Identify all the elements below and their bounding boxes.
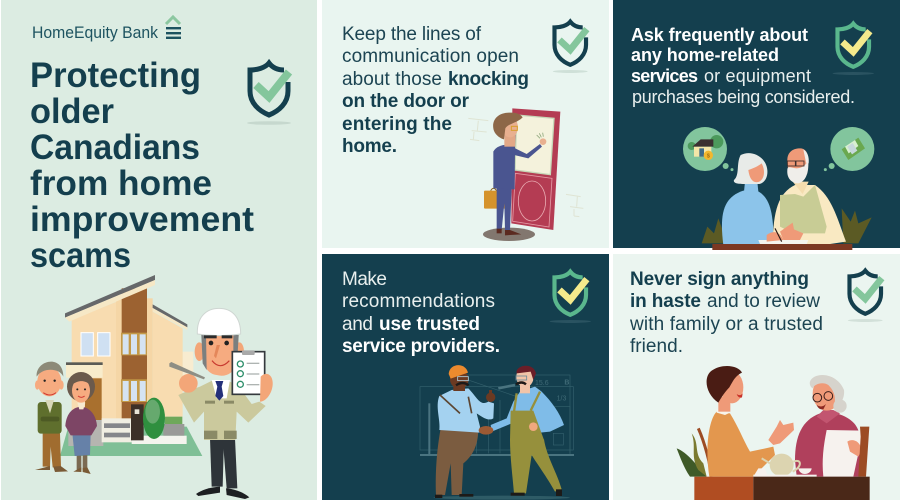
text: keep the lines (342, 24, 529, 157)
building blueprint (420, 375, 574, 455)
text: ask frequently: Ask frequently about (631, 25, 808, 45)
younger woman (707, 366, 794, 477)
text: keep the lines: on the door or (342, 91, 470, 112)
text: keep the lines: knocking (448, 69, 529, 90)
text: ask frequently: any home-related (631, 45, 779, 65)
text: never sign (629, 269, 823, 357)
text: ask frequently: purchases being considered. (632, 87, 855, 107)
text: never sign: Never sign anything (630, 269, 809, 290)
illustration: two women at table (677, 366, 870, 500)
illustration: tradesmen shaking hands: 15.6 (535, 380, 549, 387)
panel: keep communication open (322, 0, 609, 248)
heading (30, 55, 254, 275)
icon: shield (550, 272, 591, 323)
text: make recommendations: Make (342, 269, 387, 290)
person: contractor with clipboard (169, 308, 273, 499)
right worker (479, 366, 564, 496)
heading: older (30, 91, 114, 131)
text: keep the lines: home. (342, 136, 397, 157)
woman (722, 153, 773, 245)
logo: HomeEquity Bank (32, 24, 159, 42)
person: older man (35, 362, 68, 472)
text: never sign: friend. (630, 336, 683, 357)
text: keep the lines: communication open (342, 46, 519, 67)
panel: ask frequently (613, 0, 900, 250)
house (60, 275, 202, 456)
heading: from home (30, 163, 212, 203)
thought bubble: house: $ (707, 154, 711, 160)
tea set and table (694, 454, 870, 500)
illustration: tradesmen shaking hands: B (564, 379, 569, 386)
illustration: tradesmen shaking hands (420, 365, 574, 500)
illustration: older couple with thought bubbles (683, 127, 874, 250)
text: make recommendations: and (342, 314, 373, 335)
text: keep the lines: Keep the lines of (342, 24, 482, 45)
text: never sign: in haste (630, 291, 701, 312)
text: make recommendations: service providers. (342, 336, 500, 357)
illustration: man knocking on door (468, 108, 583, 241)
text: keep the lines: entering the (342, 114, 452, 135)
icon: shield (833, 24, 874, 75)
logo (32, 17, 181, 42)
text: ask frequently: services (631, 66, 698, 86)
icon: shield (553, 22, 588, 73)
left worker (435, 365, 495, 498)
text: make recommendations (342, 269, 500, 357)
text: make recommendations: use trusted (379, 314, 480, 335)
text: never sign: and to review (707, 291, 820, 312)
heading: scams (30, 235, 131, 275)
person: older woman (65, 372, 97, 474)
heading: Protecting (30, 55, 201, 95)
illustration: house, couple and contractor (35, 275, 273, 499)
heading: improvement (30, 199, 254, 239)
panel: make recommendations (322, 254, 609, 500)
panel: never sign in haste (613, 254, 900, 500)
text: ask frequently (631, 25, 855, 107)
illustration: tradesmen shaking hands: 1/3 (557, 396, 566, 403)
text: keep the lines: about those (342, 69, 442, 90)
text: never sign: with family or a trusted (629, 314, 823, 335)
man (773, 148, 846, 245)
icon: shield (247, 63, 291, 125)
panel: title (1, 0, 317, 500)
text: make recommendations: recommendations (342, 291, 495, 312)
icon: shield (848, 271, 883, 322)
text: ask frequently: or equipment (704, 66, 811, 86)
heading: Canadians (30, 127, 200, 167)
thought bubble: money (824, 127, 874, 171)
older woman (795, 375, 869, 477)
thought bubble: house (683, 127, 733, 171)
